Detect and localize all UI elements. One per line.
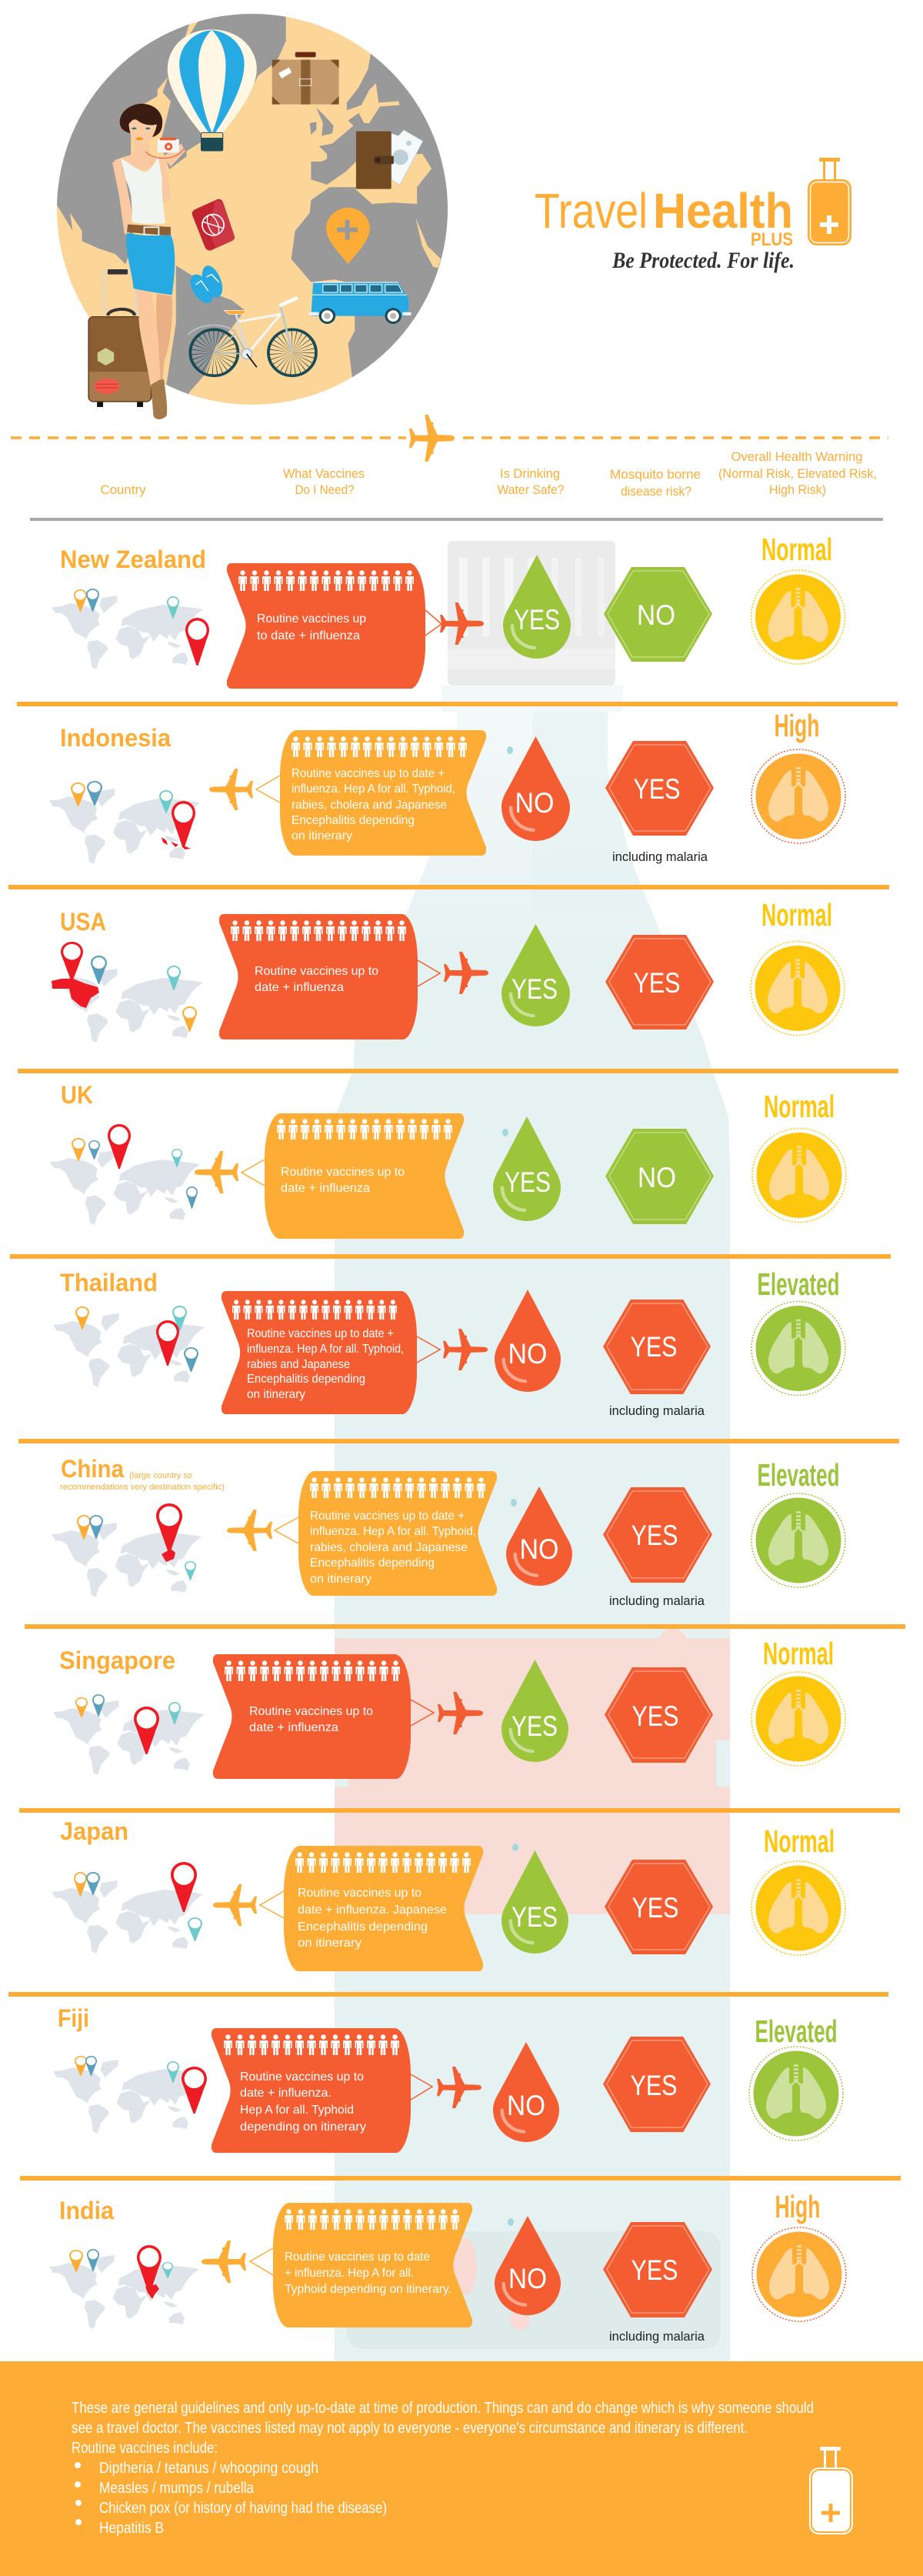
tagline: Be Protected. For life. — [611, 248, 795, 273]
icon: orange medical pin — [326, 208, 370, 264]
world map with pins — [49, 781, 200, 864]
vaccine ribbon: date + influenza. — [240, 2087, 332, 2100]
vaccine ribbon — [284, 1846, 483, 1971]
vaccine ribbon: date + influenza — [281, 1182, 370, 1195]
vaccine ribbon — [227, 563, 425, 689]
mosquito hexagon: yes — [605, 1667, 713, 1763]
mosquito hexagon: no: NO — [638, 1162, 676, 1193]
mosquito hexagon: yes — [605, 935, 714, 1029]
row: India — [49, 2189, 846, 2344]
water drop: no — [501, 736, 570, 841]
routine vaccines list: Measles / mumps / rubella — [99, 2480, 255, 2497]
icon: white suitcase — [810, 2447, 852, 2534]
water drop: yes — [501, 1660, 568, 1762]
vaccine ribbon — [280, 730, 486, 856]
risk label: Elevated — [757, 1457, 840, 1493]
lungs icon — [751, 1493, 845, 1587]
vaccine ribbon: rabies and Japanese — [247, 1358, 350, 1371]
risk label: Elevated — [755, 2014, 837, 2049]
mosquito hexagon: yes — [605, 741, 714, 836]
header: vaccines: What Vaccines — [283, 467, 365, 481]
vaccine ribbon: Encephalitis depending — [298, 1920, 428, 1934]
header: mosquito — [610, 468, 701, 499]
world map with pins — [52, 1503, 202, 1597]
risk label: Normal — [763, 1636, 834, 1671]
vaccine ribbon: Routine vaccines up to — [240, 2070, 364, 2084]
icon: flip flops — [186, 263, 226, 307]
vaccine ribbon: date + influenza — [249, 1721, 338, 1734]
world map with pins — [52, 1862, 203, 1954]
row: Thailand — [53, 1266, 845, 1418]
mosquito hexagon: yes: YES — [634, 967, 680, 999]
lungs icon — [751, 749, 845, 843]
row dividers — [8, 702, 905, 2181]
risk label: Normal — [764, 1089, 835, 1124]
vaccine ribbon: Routine vaccines up to — [298, 1887, 422, 1900]
water drop: no — [495, 1290, 561, 1392]
country name: India — [59, 2197, 114, 2224]
water drop: yes — [493, 1116, 561, 1221]
water drop: no — [493, 2042, 559, 2142]
routine vaccines list: Diptheria / tetanus / whooping cough — [99, 2460, 318, 2477]
dashed flight path with plane — [11, 415, 888, 462]
header: mosquito: disease risk? — [621, 485, 691, 499]
header: vaccines: Do I Need? — [295, 483, 354, 497]
mosquito hexagon: yes: YES — [632, 1892, 678, 1924]
disclaimer text: These are general guidelines and only up-to-date at time of production. Things can and do change which is why someone should — [72, 2400, 814, 2417]
vaccine ribbon: Routine vaccines up to — [255, 965, 378, 978]
plane arrow — [425, 602, 484, 645]
malaria note: including malaria — [609, 2329, 705, 2344]
water drop: yes — [501, 1844, 568, 1954]
header: overall warning: Overall Health Warning — [731, 450, 863, 464]
vaccine ribbon: Routine vaccines up to date + — [310, 1510, 465, 1523]
vaccine ribbon: influenza. Hep A for all. Typhoid, — [247, 1343, 404, 1356]
plane arrow — [195, 1151, 265, 1193]
vaccine ribbon: on itinerary — [298, 1937, 362, 1950]
column headers — [100, 450, 877, 499]
water drop: no — [506, 1487, 572, 1586]
mosquito hexagon: yes: YES — [632, 1700, 678, 1732]
malaria note: including malaria — [609, 1593, 705, 1608]
country name: Fiji — [58, 2004, 89, 2032]
water drop: no: NO — [520, 1533, 558, 1565]
lungs icon — [751, 1861, 845, 1955]
lungs icon — [751, 1672, 845, 1766]
plane arrow — [209, 769, 280, 810]
vaccine ribbon: on itinerary — [310, 1573, 372, 1586]
vaccine ribbon: to date + influenza — [257, 629, 360, 642]
vaccine ribbon: Routine vaccines up to date + — [247, 1327, 394, 1340]
header: vaccines — [283, 467, 365, 497]
china note: (large country so — [129, 1471, 192, 1480]
row: China — [52, 1455, 845, 1608]
risk label: Normal — [761, 897, 832, 933]
water drop: yes — [503, 555, 571, 659]
icon: hot air balloon — [168, 29, 257, 151]
lungs icon — [751, 570, 845, 664]
country name: New Zealand — [60, 546, 206, 573]
mosquito hexagon: yes — [603, 1487, 712, 1583]
mosquito hexagon: no — [604, 567, 712, 662]
water drop: yes: YES — [511, 1901, 558, 1933]
world map with pins — [49, 2245, 199, 2329]
vaccine ribbon: rabies, cholera and Japanese — [310, 1541, 468, 1554]
disclaimer text: Routine vaccines include: — [72, 2440, 218, 2457]
mosquito hexagon: yes: YES — [631, 2070, 677, 2101]
mosquito hexagon: yes — [603, 2222, 712, 2317]
plane arrow — [411, 2067, 481, 2108]
header: mosquito: Mosquito borne — [610, 468, 701, 482]
world map with pins — [50, 1124, 200, 1225]
icon: blue camper van — [309, 282, 412, 324]
routine vaccines list — [75, 2460, 387, 2537]
water drop: no: NO — [507, 2090, 545, 2121]
water drop: no: NO — [508, 2263, 547, 2294]
header: country: Country — [100, 483, 146, 497]
water drop: no: NO — [515, 787, 554, 819]
vaccine ribbon — [222, 1291, 417, 1414]
risk label: High — [774, 708, 820, 743]
vaccine ribbon: Routine vaccines up to — [281, 1166, 405, 1179]
row: UK — [50, 1081, 846, 1239]
row: Fiji — [53, 2004, 843, 2153]
logo wordmark bold: Health — [653, 183, 793, 239]
mosquito hexagon: no — [605, 1129, 714, 1224]
water drop: yes: YES — [511, 973, 558, 1005]
vaccine ribbon: Routine vaccines up to — [249, 1705, 373, 1718]
mosquito hexagon: yes: YES — [634, 773, 680, 805]
malaria note: including malaria — [609, 1403, 705, 1418]
mosquito hexagon: yes: YES — [631, 1331, 677, 1363]
icon: logo suitcase — [808, 158, 851, 245]
vaccine ribbon: date + influenza — [255, 981, 344, 994]
plane arrow — [227, 1510, 298, 1551]
icon: red passport — [192, 199, 235, 251]
risk label: High — [775, 2189, 820, 2224]
vaccine ribbon — [212, 2028, 411, 2153]
vaccine ribbon: + influenza. Hep A for all. — [285, 2267, 414, 2280]
mosquito hexagon: yes — [603, 2037, 711, 2132]
icon: brown briefcase — [272, 52, 339, 105]
mosquito hexagon: yes — [603, 1300, 711, 1394]
plane arrow — [202, 2241, 273, 2283]
vaccine ribbon: Hep A for all. Typhoid — [240, 2104, 354, 2117]
vaccine ribbon — [265, 1113, 464, 1239]
risk label: Normal — [761, 532, 832, 567]
country name: China — [61, 1455, 124, 1483]
risk label: Elevated — [757, 1266, 840, 1302]
water drop: no: NO — [508, 1338, 548, 1370]
logo: TravelHealth Plus — [535, 158, 851, 273]
lungs icon — [752, 2227, 846, 2321]
vaccine ribbon — [213, 1654, 411, 1779]
vaccine ribbon: date + influenza. Japanese — [298, 1904, 447, 1917]
lungs icon — [751, 942, 845, 1036]
vaccine ribbon: Encephalitis depending — [292, 814, 415, 827]
header: water — [497, 467, 565, 497]
water drop: no — [495, 2216, 561, 2315]
water drop: yes: YES — [511, 1710, 558, 1742]
vaccine ribbon: Routine vaccines up to date + — [292, 767, 445, 780]
mosquito hexagon: no: NO — [637, 599, 675, 631]
country name: Thailand — [60, 1269, 158, 1296]
routine vaccines list: Hepatitis B — [99, 2520, 164, 2537]
country name: UK — [61, 1081, 93, 1109]
water drop: yes — [501, 924, 570, 1026]
logo plus: PLUS — [751, 229, 793, 250]
world map with pins — [52, 589, 209, 669]
routine vaccines list: Chicken pox (or history of having had the disease) — [99, 2500, 387, 2517]
vaccine ribbon: on itinerary — [292, 829, 352, 843]
vaccine ribbon — [298, 1471, 497, 1596]
plane arrow — [418, 952, 488, 994]
header: overall warning: (Normal Risk, Elevated Risk, — [718, 467, 877, 481]
row: USA — [52, 897, 845, 1043]
china note — [60, 1471, 225, 1492]
china note: recommendations very destination specific) — [60, 1483, 225, 1492]
country name: Japan — [60, 1817, 128, 1845]
country name: USA — [60, 908, 106, 936]
background bottle illustration — [335, 541, 730, 2361]
world map with pins — [53, 1306, 205, 1387]
vaccine ribbon: on itinerary — [247, 1388, 305, 1401]
world map with pins — [53, 1694, 205, 1775]
icon: wallet with banknotes — [356, 130, 423, 189]
vaccine ribbon: Routine vaccines up to date — [285, 2251, 430, 2264]
vaccine ribbon: Routine vaccines up — [257, 612, 366, 626]
water drop: yes: YES — [505, 1166, 551, 1198]
plane arrow — [417, 1329, 488, 1370]
world map with pins — [53, 2056, 207, 2134]
header: water: Water Safe? — [497, 483, 565, 497]
header: water: Is Drinking — [500, 467, 560, 481]
country name: Indonesia — [60, 724, 171, 752]
vaccine ribbon: influenza. Hep A for all. Typhoid, — [310, 1525, 476, 1538]
plane arrow — [411, 1692, 483, 1734]
mosquito hexagon: yes: YES — [631, 1520, 678, 1551]
plane arrow — [213, 1884, 284, 1926]
header: overall warning: High Risk) — [769, 483, 826, 497]
disclaimer text — [72, 2400, 814, 2457]
disclaimer text: see a travel doctor. The vaccines listed may not apply to everyone - everyone's circumstance and itinerary is different. — [72, 2420, 748, 2437]
lungs icon — [751, 1302, 845, 1396]
icon: bicycle — [188, 299, 316, 375]
footer panel — [0, 2361, 923, 2576]
vaccine ribbon: Encephalitis depending — [247, 1373, 365, 1386]
vaccine ribbon — [273, 2203, 472, 2327]
malaria note: including malaria — [612, 849, 708, 864]
lungs icon — [749, 2047, 843, 2141]
country name: Singapore — [59, 1647, 175, 1674]
vaccine ribbon: rabies, cholera and Japanese — [292, 799, 447, 812]
mosquito hexagon: yes: YES — [631, 2254, 678, 2286]
row: New Zealand — [52, 532, 845, 689]
header: overall warning — [718, 450, 877, 497]
logo wordmark: Travel — [535, 183, 648, 239]
illustration: rolling suitcase — [88, 269, 152, 407]
vaccine ribbon: depending on itinerary — [240, 2121, 366, 2134]
mosquito hexagon: yes — [605, 1860, 713, 1954]
vaccine ribbon: influenza. Hep A for all. Typhoid, — [292, 782, 455, 796]
vaccine ribbon — [219, 914, 418, 1039]
vaccine ribbon: Typhoid depending on itinerary. — [285, 2283, 452, 2296]
row: Indonesia — [49, 708, 845, 864]
hero illustration: globe with traveller — [57, 14, 448, 419]
vaccine ribbon: Encephalitis depending — [310, 1557, 435, 1570]
row: Singapore — [53, 1636, 845, 1779]
water drop: yes: YES — [514, 604, 560, 636]
illustration: woman traveller — [112, 104, 185, 419]
row: Japan — [52, 1817, 845, 1971]
lungs icon — [752, 1128, 846, 1222]
world map with pins — [52, 942, 203, 1043]
risk label: Normal — [764, 1824, 835, 1859]
